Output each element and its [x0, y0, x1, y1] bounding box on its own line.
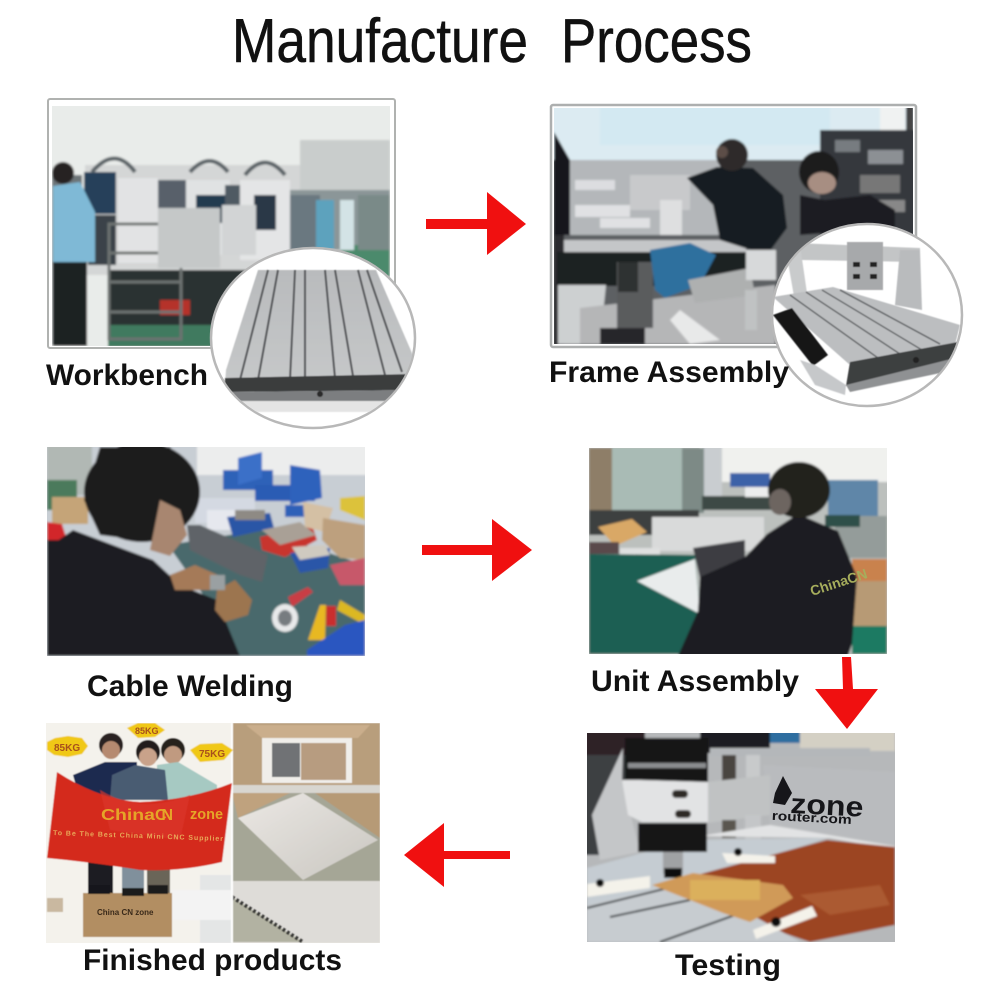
flag	[47, 772, 232, 870]
arrow: workbench to frame	[426, 192, 526, 255]
panel: frame assembly photo	[550, 105, 920, 350]
panel: testing photo: router.com	[771, 808, 852, 827]
icon: workbench plate inset	[211, 248, 415, 428]
arrow: testing to finished products	[404, 823, 510, 887]
price badges	[47, 736, 88, 757]
panel: unit assembly photo	[587, 446, 890, 656]
arrow: unit assembly to testing	[815, 657, 878, 729]
panel: finished products photo: To Be The Best China Mini CNC Supplier	[53, 830, 223, 843]
label: Testing: Testing	[675, 949, 781, 982]
label: Workbench: Workbench	[46, 359, 208, 392]
panel: finished products photo: 85KG	[54, 743, 80, 754]
icon: frame inset	[772, 224, 962, 406]
table	[168, 530, 365, 656]
spindle	[625, 738, 708, 783]
title	[232, 7, 752, 76]
title: Process	[561, 7, 752, 76]
panel: finished products photo: 85KG	[135, 726, 159, 736]
panel: finished products photo: China CN zone	[97, 908, 154, 917]
box	[83, 893, 172, 937]
panel: finished products photo: China	[101, 807, 155, 824]
panel: workbench photo	[45, 99, 395, 350]
machines	[118, 178, 158, 263]
cables	[187, 525, 268, 582]
label: Frame Assembly: Frame Assembly	[549, 356, 789, 389]
panel: finished products photo: 75KG	[199, 749, 225, 760]
panel: finished products photo: zone	[190, 806, 223, 823]
label: Finished products: Finished products	[83, 944, 342, 977]
people	[316, 200, 334, 250]
panel: cable welding photo	[45, 442, 367, 658]
men	[88, 860, 113, 893]
bins	[223, 470, 273, 490]
label: Cable Welding: Cable Welding	[87, 670, 293, 703]
panel: finished products photo: CN	[155, 807, 173, 824]
arrow: welding to unit assembly	[422, 519, 532, 581]
board	[697, 840, 895, 942]
title: Manufacture	[232, 7, 528, 76]
right column	[232, 723, 380, 786]
tools	[288, 587, 313, 607]
panel: finished products photo	[44, 721, 382, 945]
panel: testing photo: zone	[790, 788, 864, 823]
label: Unit Assembly: Unit Assembly	[591, 665, 799, 698]
panel: unit assembly photo: ChinaCN	[808, 565, 869, 599]
cart	[109, 224, 181, 339]
floor	[108, 268, 246, 327]
man	[84, 442, 200, 542]
panel: testing photo	[585, 731, 897, 944]
